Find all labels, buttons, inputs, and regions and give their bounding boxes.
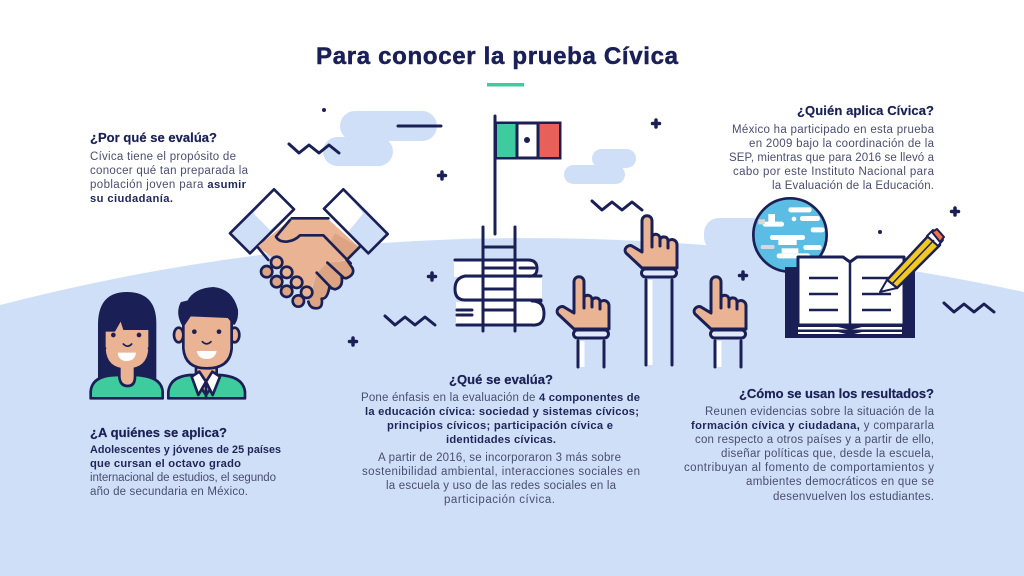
title underline — [487, 83, 524, 86]
text block: qué se evalúa: la educación cívica: sociedad y sistemas cívicos; — [365, 406, 639, 418]
text block: qué se evalúa: la escuela y uso de las redes sociales en la — [386, 480, 617, 492]
squiggle above hand — [592, 201, 642, 210]
icon: raised hand right — [694, 277, 746, 367]
text block: quién aplica — [729, 103, 935, 192]
text block: quién aplica: México ha participado en esta prueba — [732, 124, 935, 136]
text block: qué se evalúa: Pone énfasis en la evaluación de 4 componentes de — [361, 392, 640, 404]
text block: quién aplica: la Evaluación de la Educación. — [772, 180, 934, 192]
icon: boy — [168, 288, 245, 398]
cloud behind globe — [704, 218, 784, 252]
text block: a quiénes se aplica: año de secundaria en México. — [90, 486, 248, 498]
text block: cómo se usan los resultados: ambientes democráticos en que se — [746, 476, 934, 488]
text block: cómo se usan los resultados: Reunen evidencias sobre la situación de la — [705, 406, 935, 418]
sparkles — [322, 108, 958, 345]
squiggle right — [944, 303, 994, 312]
text block: quién aplica: cabo por este Instituto Nacional para — [733, 166, 935, 178]
clouds top left — [323, 111, 437, 166]
text block: por qué se evalúa — [90, 130, 249, 205]
icon: flag — [495, 116, 560, 234]
text block: qué se evalúa: participación cívica. — [444, 494, 555, 506]
icon: books and ladder — [454, 227, 544, 331]
icon: girl — [91, 293, 163, 398]
decorative line over cloud — [398, 124, 441, 128]
text block: por qué se evalúa: Cívica tiene el propósito de — [90, 151, 236, 163]
icon: globe — [753, 198, 827, 272]
text block: por qué se evalúa: su ciudadanía. — [90, 193, 173, 205]
text block: cómo se usan los resultados: contribuyan al fomento de comportamientos y — [684, 462, 934, 474]
text block: qué se evalúa: sostenibilidad ambiental, interacciones sociales en — [362, 466, 640, 478]
text block: cómo se usan los resultados: con respecto a otros países y a partir de ello, — [695, 434, 934, 446]
text block: quién aplica: ¿Quién aplica Cívica? — [797, 103, 934, 118]
text block: qué se evalúa: identidades cívicas. — [446, 434, 556, 446]
clouds top center — [564, 149, 636, 184]
icon: raised hand left — [557, 277, 609, 367]
text block: qué se evalúa: ¿Qué se evalúa? — [449, 372, 553, 387]
text block: quién aplica: SEP, mientras que para 2016 se llevó a — [729, 152, 935, 164]
text block: cómo se usan los resultados — [684, 386, 935, 503]
text block: cómo se usan los resultados: diseñar políticas que, desde la escuela, — [721, 448, 934, 460]
title: Para conocer la prueba Cívica — [316, 43, 679, 70]
text block: a quiénes se aplica — [90, 425, 281, 498]
icon: raised hand center — [625, 216, 677, 365]
icon: handshake — [230, 189, 388, 308]
text block: qué se evalúa: A partir de 2016, se incorporaron 3 más sobre — [378, 452, 621, 464]
text block: quién aplica: en 2009 bajo la coordinación de la — [749, 138, 935, 150]
squiggle lower middle — [385, 316, 435, 325]
background hill — [0, 238, 1024, 576]
text block: a quiénes se aplica: ¿A quiénes se aplica? — [90, 425, 227, 440]
text block: qué se evalúa: principios cívicos; participación cívica e — [387, 420, 613, 432]
text block: a quiénes se aplica: que cursan el octavo grado — [90, 458, 241, 470]
text block: cómo se usan los resultados: formación cívica y ciudadana, y compararla — [691, 420, 935, 432]
text block: a quiénes se aplica: Adolescentes y jóvenes de 25 países — [90, 444, 281, 456]
text block: a quiénes se aplica: internacional de estudios, el segundo — [90, 472, 276, 484]
text block: cómo se usan los resultados: ¿Cómo se usan los resultados? — [739, 386, 934, 401]
text block: por qué se evalúa: conocer qué tan preparada la — [90, 165, 249, 177]
text block: por qué se evalúa: ¿Por qué se evalúa? — [90, 130, 217, 145]
squiggle top left — [289, 144, 339, 153]
icon: pencil — [880, 229, 944, 292]
text block: cómo se usan los resultados: desenvuelven los estudiantes. — [773, 491, 934, 503]
text block: por qué se evalúa: población joven para asumir — [90, 179, 247, 191]
icon: open book — [785, 257, 915, 338]
text block: qué se evalúa — [361, 372, 640, 506]
